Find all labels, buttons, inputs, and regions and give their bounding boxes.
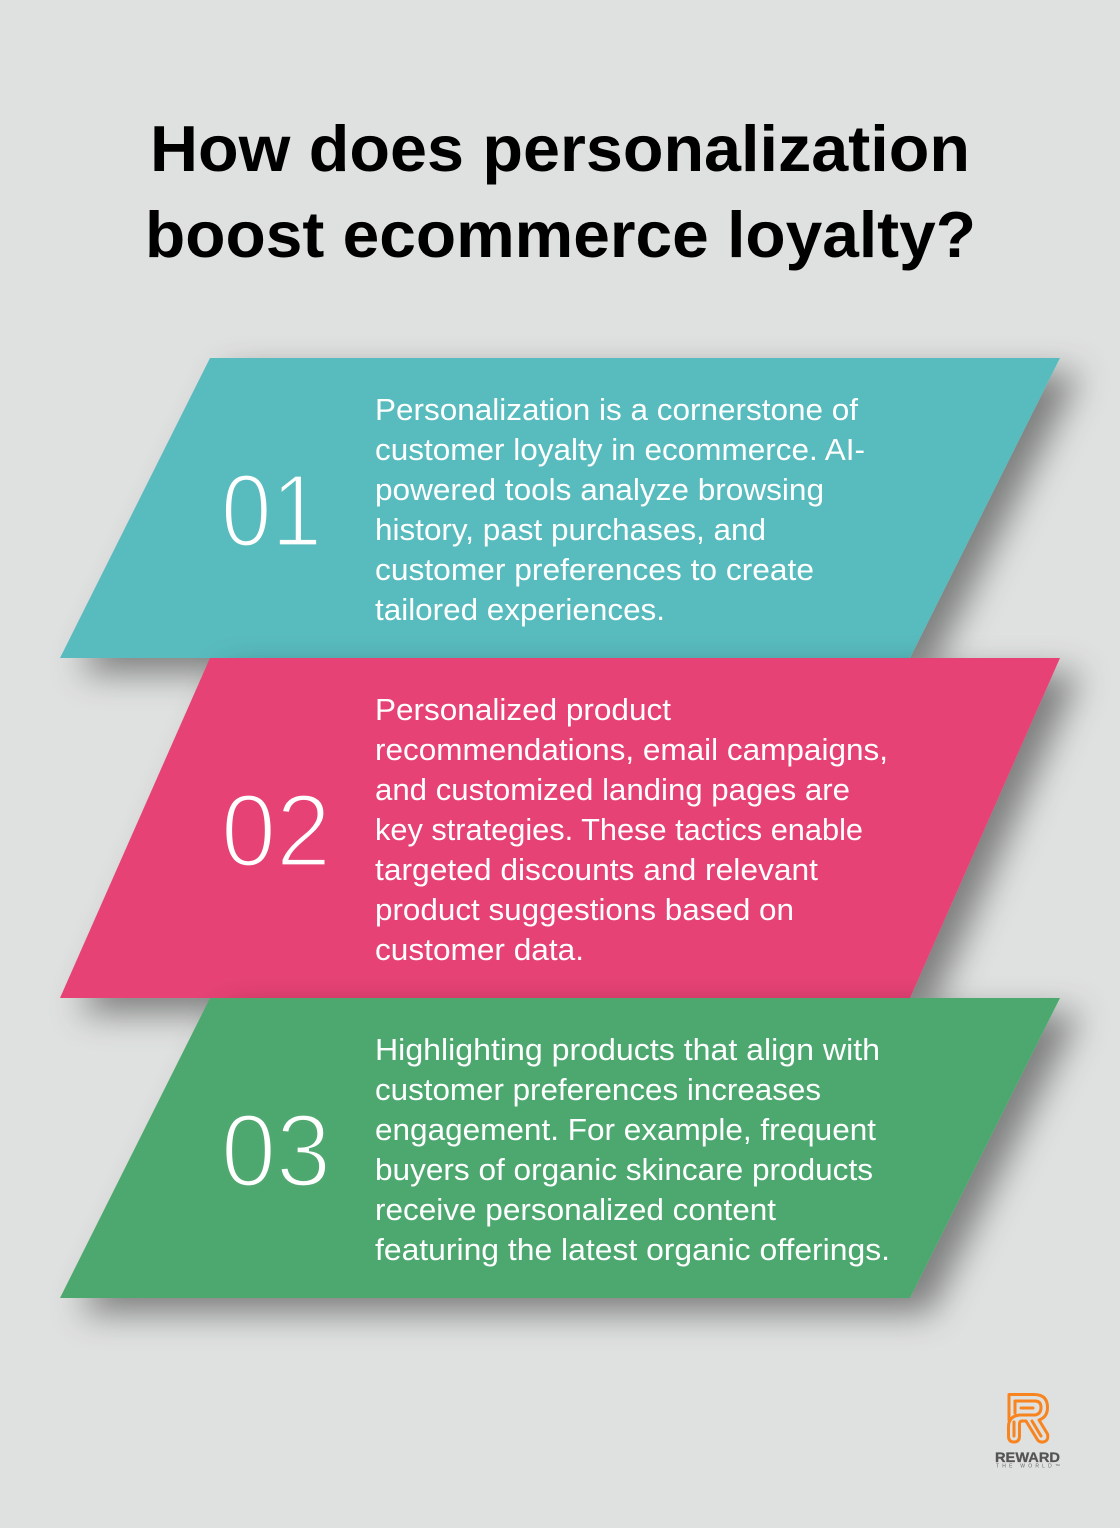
number 03: 03 (221, 1093, 331, 1208)
title: boost ecommerce loyalty? (145, 198, 976, 271)
wordmark: REWARD: REWARD (995, 1449, 1060, 1465)
text block: step 02: recommendations, email campaigns, (375, 733, 888, 767)
text block: step 03: featuring the latest organic offerings. (375, 1233, 890, 1267)
text block: step 02: Personalized product (375, 693, 672, 727)
text block: step 03: buyers of organic skincare products (375, 1153, 873, 1187)
number 02: 02 (221, 773, 331, 888)
text block: step 03: customer preferences increases (375, 1073, 821, 1107)
text block: step 01: history, past purchases, and (375, 513, 766, 547)
text block: step 02: customer data. (375, 933, 584, 967)
icon: orange R mark (1008, 1394, 1048, 1442)
panel: step 01 (60, 358, 1060, 658)
text block: step 03: Highlighting products that align with (375, 1033, 880, 1067)
title (145, 112, 976, 271)
logo: Reward the World (995, 1394, 1060, 1470)
text block: step 03 (375, 1033, 890, 1267)
text block: step 01: customer preferences to create (375, 553, 814, 587)
text block: step 01: customer loyalty in ecommerce. AI- (375, 433, 865, 467)
panel: step 02 (60, 658, 1060, 998)
text block: step 03: engagement. For example, frequent (375, 1113, 877, 1147)
wordmark: THE WORLD: THE WORLD™ (996, 1464, 1060, 1470)
panel shape: teal parallelogram (60, 358, 1060, 658)
text block: step 03: receive personalized content (375, 1193, 777, 1227)
text block: step 02: product suggestions based on (375, 893, 794, 927)
text block: step 02: targeted discounts and relevant (375, 853, 819, 887)
text block: step 01: Personalization is a cornerstone of (375, 393, 859, 427)
panel shape: pink parallelogram (60, 658, 1060, 998)
text block: step 01: tailored experiences. (375, 593, 665, 627)
text block: step 01: powered tools analyze browsing (375, 473, 824, 507)
panel: step 03 (60, 998, 1060, 1298)
text block: step 01 (375, 393, 865, 627)
panel shape: green parallelogram (60, 998, 1060, 1298)
number 01: 01 (221, 453, 322, 568)
text block: step 02: and customized landing pages are (375, 773, 850, 807)
text block: step 02 (375, 693, 888, 967)
text block: step 02: key strategies. These tactics enable (375, 813, 863, 847)
title: How does personalization (150, 112, 970, 185)
